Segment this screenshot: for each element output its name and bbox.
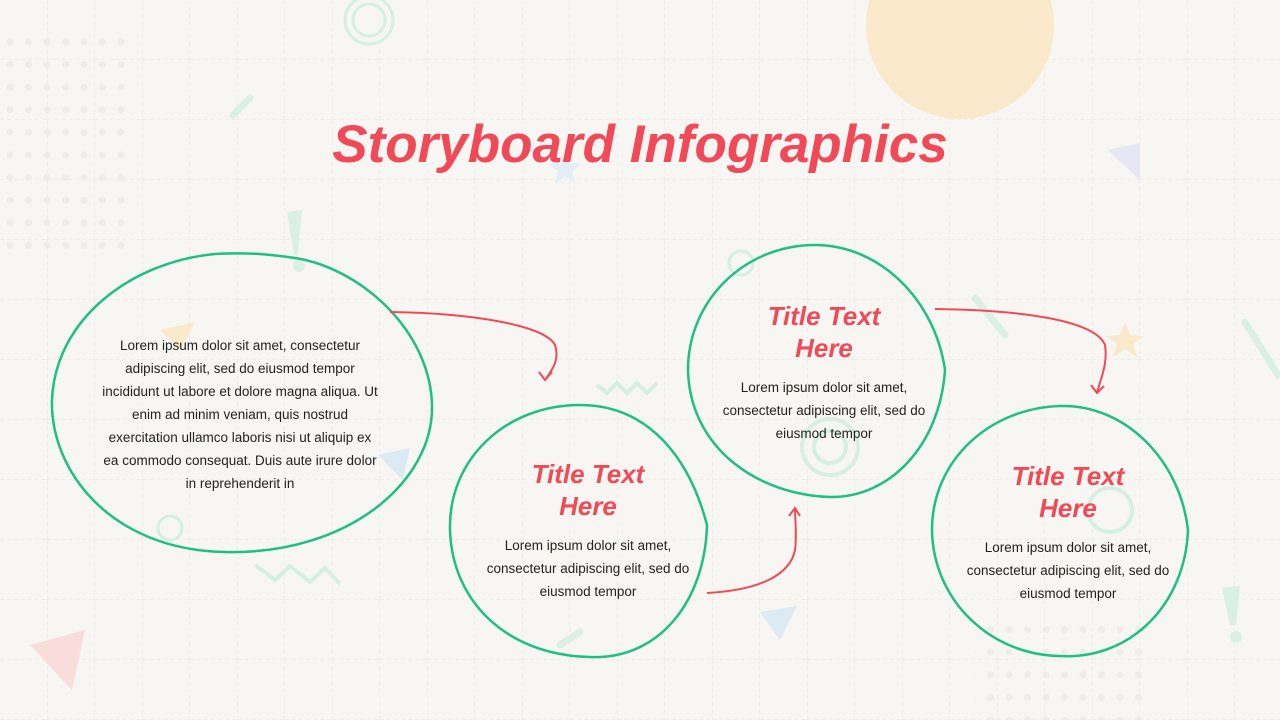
arrow 1 [390,312,557,380]
text block 3: Here [795,333,853,363]
text block 4: Lorem ipsum dolor sit amet, consectetur adipiscing elit, sed do eiusmod tempor [967,540,1169,601]
text block 2: Here [559,491,617,521]
text block 2: Title Text [532,459,644,489]
text block 2 [487,459,689,599]
arrow 3 [935,309,1106,393]
title: Storyboard Infographics [332,115,948,174]
blob 3 [688,245,945,497]
text block 4: Here [1039,493,1097,523]
text block 1: Lorem ipsum dolor sit amet, consectetur adipiscing elit, sed do eiusmod tempor incididunt ut labore et dolore magna aliqua. Ut enim ad minim veniam, quis nostrud exercitation ullamco laboris nisi ut aliquip ex ea commodo consequat. Duis aute irure dolor in reprehenderit in [102,338,378,491]
text block 2: Lorem ipsum dolor sit amet, consectetur adipiscing elit, sed do eiusmod tempor [487,538,689,599]
arrow 2 [707,508,800,593]
blob 2 [450,405,707,657]
text block 4: Title Text [1012,461,1124,491]
text block 3: Title Text [768,301,880,331]
text block 4 [967,461,1169,601]
text block 3 [723,301,925,441]
blob 4 [932,406,1188,656]
blob 1 [52,253,432,552]
text block 3: Lorem ipsum dolor sit amet, consectetur adipiscing elit, sed do eiusmod tempor [723,380,925,441]
